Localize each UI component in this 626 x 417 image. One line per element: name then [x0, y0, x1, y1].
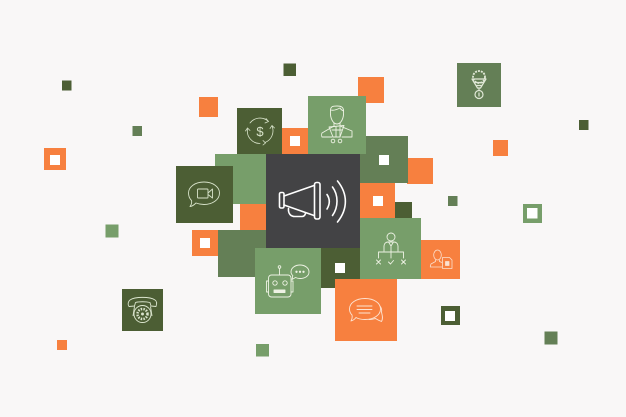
panel: telephone [122, 289, 163, 331]
scattered square: dark far right [579, 120, 588, 130]
scattered square: light green bottom [256, 344, 269, 356]
scattered square: orange bottom left [57, 340, 67, 350]
tile: orange with white centre left [192, 230, 218, 256]
icon: robot with speech bubble [266, 265, 309, 297]
icon: video bubble [188, 182, 220, 206]
scattered square: dark top left [62, 80, 72, 90]
panel: decision tree [360, 218, 421, 279]
scattered square: green top left [132, 126, 142, 136]
tile: orange with white centre below mid green [360, 183, 395, 219]
icon: chat bubbles [350, 298, 383, 322]
panel: gear funnel [457, 63, 501, 107]
panel: chat bubbles [335, 279, 397, 341]
panel: person with document [421, 240, 460, 279]
tile: dark with white centre [320, 248, 361, 288]
icon: dollar cycle: $ [256, 124, 264, 139]
scattered square: hollow light green [523, 204, 542, 223]
panel: centre megaphone [266, 154, 360, 248]
tile: orange under video [240, 204, 267, 230]
scattered square: light green left [106, 224, 118, 238]
icon: gear funnel with coin [472, 71, 486, 98]
tile: mid green lower left [218, 230, 266, 277]
icon: megaphone [280, 181, 345, 222]
scattered square: orange upper [199, 97, 218, 117]
scattered square: orange with white centre [44, 148, 66, 170]
tile: mid green with white centre [360, 136, 408, 183]
icon: person with decision branches [376, 233, 406, 264]
icon: rotary telephone [128, 297, 157, 322]
panel: robot chat [255, 248, 321, 314]
scattered square: orange right [493, 140, 508, 156]
scattered square: green right [448, 196, 458, 206]
panel: shopper person [308, 96, 366, 154]
icon: person with cart [322, 106, 352, 143]
tile: orange right [407, 158, 433, 184]
scattered square: dark top [284, 64, 296, 76]
tile: light green behind video [215, 154, 267, 204]
icon: person with document [430, 250, 452, 268]
tile: orange with white centre near dollar [282, 128, 309, 155]
panel: dollar cycle [237, 108, 282, 154]
scattered square: green bottom right [544, 332, 558, 344]
tile: dark small right [395, 202, 412, 219]
panel: video chat [176, 166, 233, 223]
tile: orange top [358, 77, 384, 103]
scattered square: hollow dark [441, 306, 460, 325]
